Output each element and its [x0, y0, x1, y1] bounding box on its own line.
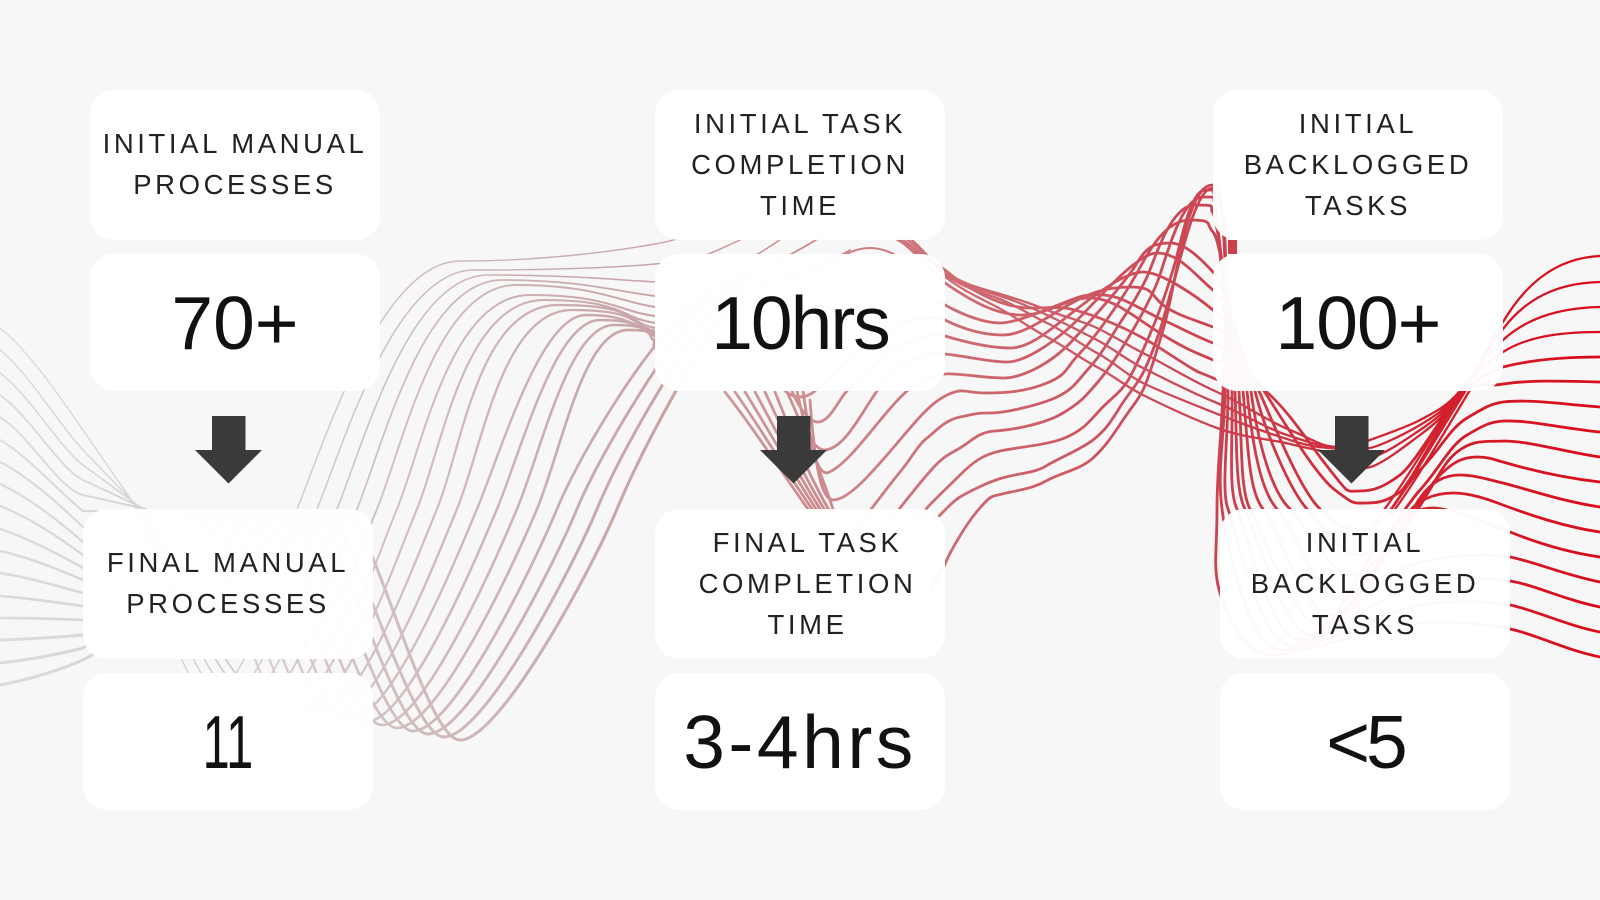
final task completion time label: TIME — [767, 608, 848, 640]
initial task completion time value: 10hrs — [711, 280, 889, 364]
final manual processes label: PROCESSES — [126, 588, 330, 619]
final manual processes label: FINAL MANUAL — [107, 547, 349, 578]
initial manual processes label — [90, 90, 380, 240]
arrow: task completion time — [760, 416, 827, 484]
initial manual processes label: INITIAL MANUAL — [103, 128, 367, 159]
initial manual processes value: 70+ — [171, 280, 299, 364]
initial task completion time label — [655, 90, 945, 240]
initial manual processes value — [90, 254, 380, 391]
initial backlogged tasks value: 100+ — [1276, 280, 1440, 364]
final task completion time label — [655, 509, 945, 659]
final manual processes value — [83, 673, 373, 810]
final backlogged tasks label: BACKLOGGED — [1251, 568, 1479, 598]
panel: task completion time — [655, 108, 945, 784]
initial backlogged tasks label: INITIAL — [1299, 108, 1417, 138]
final backlogged tasks label: TASKS — [1312, 608, 1418, 640]
panel: manual processes — [83, 128, 380, 784]
final backlogged tasks label — [1220, 509, 1510, 659]
initial backlogged tasks label — [1213, 90, 1503, 240]
initial manual processes label: PROCESSES — [133, 169, 337, 200]
final task completion time label: FINAL TASK — [713, 526, 902, 558]
panel: backlogged tasks — [1213, 108, 1510, 784]
final backlogged tasks label: INITIAL — [1306, 526, 1424, 558]
final manual processes value: 11 — [203, 700, 253, 784]
initial task completion time label: TIME — [760, 190, 840, 220]
initial backlogged tasks value — [1213, 254, 1503, 391]
final task completion time value — [655, 673, 945, 810]
arrow: manual processes — [195, 416, 262, 484]
final backlogged tasks value: <5 — [1326, 700, 1404, 784]
initial task completion time value — [655, 254, 945, 391]
final task completion time label: COMPLETION — [699, 568, 916, 598]
final manual processes label — [83, 509, 373, 659]
final task completion time value: 3-4hrs — [683, 700, 917, 784]
initial task completion time label: COMPLETION — [691, 148, 909, 180]
initial backlogged tasks label: TASKS — [1305, 190, 1411, 220]
initial task completion time label: INITIAL TASK — [694, 108, 906, 138]
final backlogged tasks value — [1220, 673, 1510, 810]
initial backlogged tasks label: BACKLOGGED — [1244, 148, 1472, 180]
arrow: backlogged tasks — [1318, 416, 1385, 484]
